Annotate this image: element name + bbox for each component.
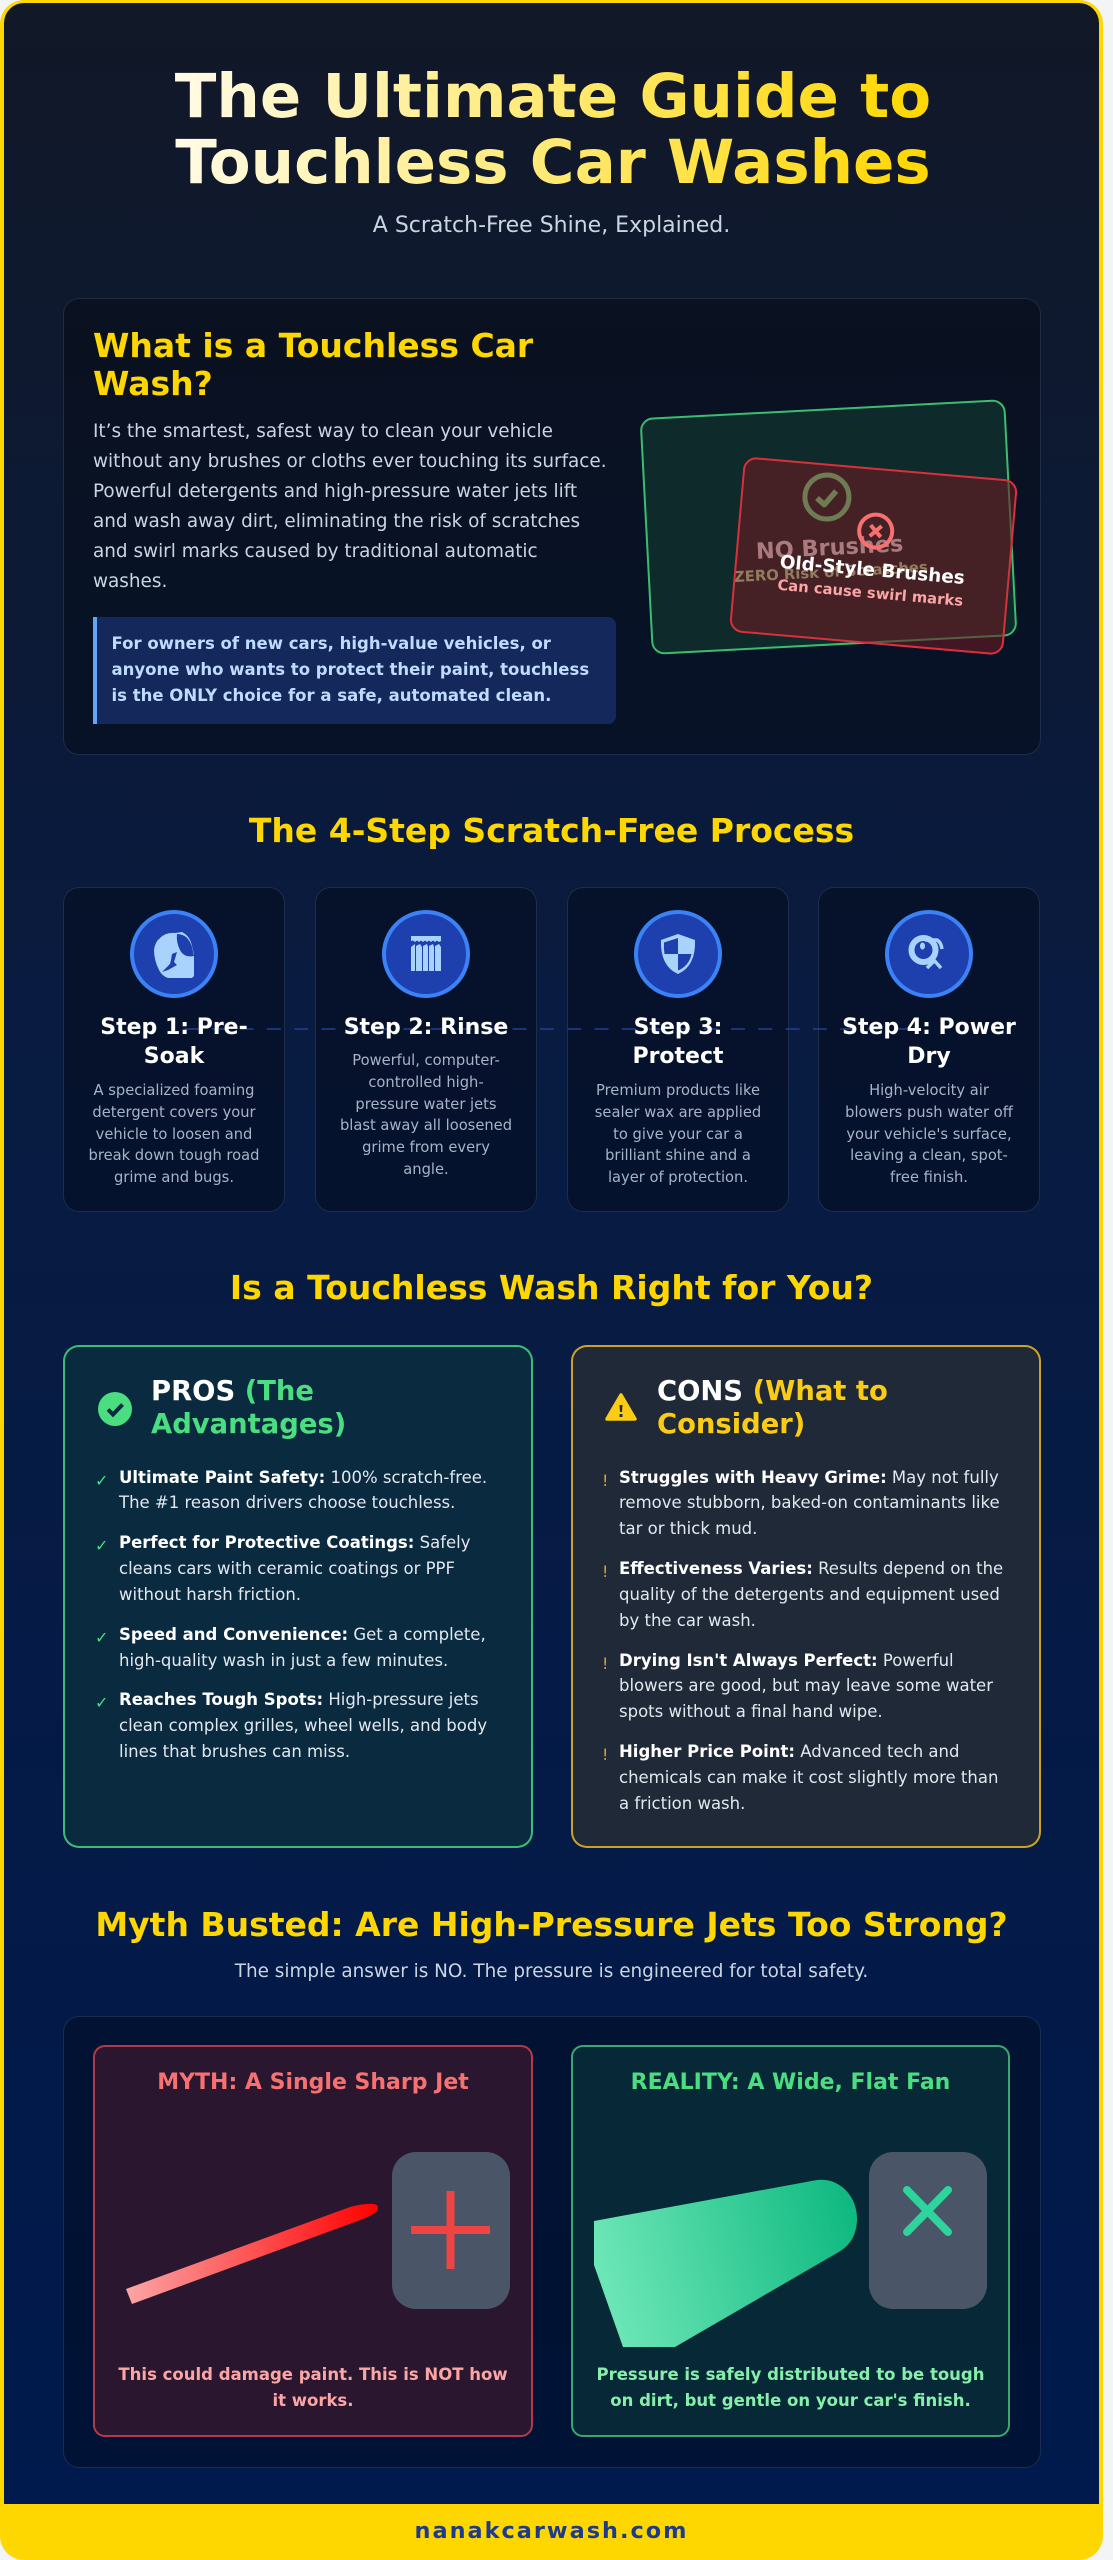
step title bbox=[632, 1015, 724, 1069]
step title: Dry bbox=[907, 1044, 951, 1069]
text block: definition: It’s the smartest, safest way to clean your vehicle bbox=[93, 421, 553, 442]
callout: who it is for: is the ONLY choice for a safe, automated clean. bbox=[112, 686, 551, 705]
step description: angle. bbox=[403, 1161, 449, 1178]
myth caption bbox=[118, 2365, 508, 2410]
icon: protective shield bbox=[634, 910, 722, 998]
step description: pressure water jets bbox=[355, 1096, 497, 1113]
reality title: REALITY: A Wide, Flat Fan bbox=[631, 2070, 950, 2094]
step title: Protect bbox=[632, 1044, 724, 1069]
step description bbox=[845, 1082, 1014, 1186]
step description: layer of protection. bbox=[608, 1169, 748, 1186]
icon: check badge bbox=[98, 1392, 132, 1426]
panel: pros: ✓ bbox=[95, 1470, 108, 1490]
pros heading bbox=[151, 1376, 346, 1440]
pros item 2: Perfect for Protective Coatings: Safely bbox=[119, 1533, 470, 1552]
step title: Soak bbox=[144, 1044, 204, 1069]
pros item 1: The #1 reason drivers choose touchless. bbox=[119, 1493, 455, 1512]
pros item 3 bbox=[95, 1625, 486, 1670]
text block: definition: and swirl marks caused by traditional automatic bbox=[93, 541, 538, 562]
step description: brilliant shine and a bbox=[605, 1147, 751, 1164]
card: no brushes: ZERO Risk of Scratches bbox=[734, 559, 928, 586]
cons item 4: Higher Price Point: Advanced tech and bbox=[619, 1742, 959, 1761]
step 2 card bbox=[315, 887, 537, 1212]
pros item 1 bbox=[95, 1468, 487, 1512]
panel: cons: ! bbox=[602, 1562, 608, 1581]
panel: what is a touchless car wash bbox=[63, 298, 1041, 755]
step title: Step 1: Pre- bbox=[100, 1015, 248, 1040]
pros heading: Advantages) bbox=[151, 1409, 346, 1440]
step description bbox=[89, 1082, 259, 1186]
step description: Powerful, computer- bbox=[352, 1052, 500, 1069]
pros item 3: Speed and Convenience: Get a complete, bbox=[119, 1625, 486, 1644]
step 1 card bbox=[63, 887, 285, 1212]
card: no brushes bbox=[641, 400, 1016, 654]
heading: myth busted: Myth Busted: Are High-Pressure Jets Too Strong? bbox=[95, 1905, 1008, 1944]
step description: to give your car a bbox=[613, 1126, 743, 1143]
reality caption: Pressure is safely distributed to be tough bbox=[596, 2365, 984, 2384]
illustration: no brushes vs old-style brushes cards bbox=[640, 400, 1018, 655]
cons item 3: spots without a final hand wipe. bbox=[619, 1702, 883, 1721]
cons item 2: by the car wash. bbox=[619, 1611, 756, 1630]
pros item 4: clean complex grilles, wheel wells, and body bbox=[119, 1716, 487, 1735]
step description: break down tough road bbox=[89, 1147, 259, 1164]
process connector line bbox=[185, 1028, 908, 1030]
text block: definition bbox=[93, 421, 607, 592]
text block: definition: and wash away dirt, eliminating the risk of scratches bbox=[93, 511, 580, 532]
step description: your vehicle's surface, bbox=[846, 1126, 1012, 1143]
reality caption bbox=[596, 2365, 984, 2410]
title bbox=[174, 64, 932, 196]
step description: leaving a clean, spot- bbox=[850, 1147, 1008, 1164]
card: old-style brushes: Old-Style Brushes bbox=[779, 552, 966, 589]
step description: blowers push water off bbox=[845, 1104, 1013, 1121]
step description bbox=[595, 1082, 761, 1186]
cons heading: Consider) bbox=[657, 1409, 805, 1440]
pros item 2: without harsh friction. bbox=[119, 1585, 301, 1604]
card: old-style brushes bbox=[730, 457, 1017, 655]
card: no brushes: NO Brushes bbox=[755, 531, 904, 565]
step description: vehicle to loosen and bbox=[96, 1126, 252, 1143]
title: The Ultimate Guide to bbox=[175, 61, 931, 132]
text block: definition: without any brushes or cloths ever touching its surface. bbox=[93, 451, 607, 472]
step description: detergent covers your bbox=[92, 1104, 256, 1121]
step title: Step 2: Rinse bbox=[344, 1015, 508, 1040]
step description bbox=[340, 1052, 512, 1178]
step title: Step 4: Power bbox=[842, 1015, 1016, 1040]
step description: grime from every bbox=[362, 1139, 490, 1156]
pros item 2: cleans cars with ceramic coatings or PPF bbox=[119, 1559, 455, 1578]
step title: Step 3: bbox=[634, 1015, 722, 1040]
cons item 1: Struggles with Heavy Grime: May not fully bbox=[619, 1468, 999, 1486]
title: Touchless Car Washes bbox=[175, 127, 931, 198]
panel: cons: ! bbox=[602, 1745, 608, 1764]
cons heading bbox=[657, 1376, 888, 1440]
step description: High-velocity air bbox=[869, 1082, 989, 1099]
cons item 1 bbox=[602, 1468, 1000, 1538]
panel: cons: ! bbox=[602, 1654, 608, 1672]
pros item 4: lines that brushes can miss. bbox=[119, 1742, 350, 1761]
cons item 1: tar or thick mud. bbox=[619, 1519, 757, 1538]
step description: sealer wax are applied bbox=[595, 1104, 761, 1121]
text block: definition: washes. bbox=[93, 571, 167, 592]
panel: cons bbox=[571, 1345, 1041, 1848]
panel: pros bbox=[63, 1345, 533, 1848]
cons item 3 bbox=[602, 1650, 994, 1721]
heading: what is: Wash? bbox=[93, 364, 213, 403]
pros item 4: Reaches Tough Spots: High-pressure jets bbox=[119, 1690, 479, 1709]
cons item 4: a friction wash. bbox=[619, 1794, 745, 1813]
icon: warning triangle bbox=[605, 1393, 637, 1421]
step description: blast away all loosened bbox=[340, 1117, 512, 1134]
step description: A specialized foaming bbox=[94, 1082, 254, 1099]
callout: who it is for bbox=[93, 617, 616, 724]
panel: pros: ✓ bbox=[95, 1628, 108, 1647]
myth caption: This could damage paint. This is NOT how bbox=[118, 2365, 508, 2384]
cons item 2: Effectiveness Varies: Results depend on the bbox=[619, 1559, 1003, 1578]
illustration: sharp jet on car panel bbox=[126, 2152, 510, 2309]
step description: free finish. bbox=[890, 1169, 968, 1186]
step description: grime and bugs. bbox=[114, 1169, 234, 1186]
pros item 1: Ultimate Paint Safety: 100% scratch-free. bbox=[119, 1468, 487, 1486]
callout: who it is for: For owners of new cars, high-value vehicles, or bbox=[112, 634, 551, 653]
card: reality bbox=[571, 2045, 1010, 2437]
cons item 2 bbox=[602, 1559, 1003, 1630]
pros heading: PROS (The bbox=[151, 1376, 314, 1406]
cons heading: CONS (What to bbox=[657, 1376, 888, 1406]
card: old-style brushes: Can cause swirl marks bbox=[777, 577, 964, 610]
card: myth bbox=[93, 2045, 533, 2437]
pros item 4 bbox=[95, 1690, 487, 1761]
panel: pros: ✓ bbox=[95, 1693, 108, 1712]
panel: cons: ! bbox=[602, 1470, 608, 1490]
heading: 4-step process: The 4-Step Scratch-Free Process bbox=[249, 811, 854, 850]
cons item 1: remove stubborn, baked-on contaminants like bbox=[619, 1493, 1000, 1512]
panel: pros: ✓ bbox=[95, 1536, 108, 1555]
cons item 4 bbox=[602, 1742, 998, 1813]
footer website: nanakcarwash.com bbox=[415, 2518, 688, 2544]
pros item 2 bbox=[95, 1533, 470, 1604]
step title bbox=[842, 1015, 1016, 1069]
cons item 3: blowers are good, but may leave some water bbox=[619, 1676, 993, 1695]
step 4 card bbox=[818, 887, 1040, 1212]
step description: controlled high- bbox=[368, 1074, 484, 1091]
pros item 3: high-quality wash in just a few minutes. bbox=[119, 1651, 448, 1670]
myth title: MYTH: A Single Sharp Jet bbox=[157, 2070, 469, 2094]
cons item 2: quality of the detergents and equipment used bbox=[619, 1585, 1000, 1604]
subheading: myth busted: The simple answer is NO. The pressure is engineered for total safety. bbox=[235, 1961, 868, 1982]
heading: what is: What is a Touchless Car bbox=[93, 326, 533, 365]
reality caption: on dirt, but gentle on your car's finish. bbox=[610, 2391, 971, 2410]
cons item 4: chemicals can make it cost slightly more than bbox=[619, 1768, 998, 1787]
heading: right for you: Is a Touchless Wash Right for You? bbox=[230, 1268, 873, 1307]
step title bbox=[100, 1015, 248, 1069]
callout: who it is for: anyone who wants to protect their paint, touchless bbox=[112, 660, 589, 679]
icon: rinse water jets bbox=[382, 910, 470, 998]
panel: myth vs reality bbox=[63, 2016, 1041, 2468]
icon: power dry blower bbox=[885, 910, 973, 998]
cons item 3: Drying Isn't Always Perfect: Powerful bbox=[619, 1650, 954, 1670]
heading: what is bbox=[93, 326, 534, 403]
step 3 card bbox=[567, 887, 789, 1212]
subtitle: A Scratch-Free Shine, Explained. bbox=[373, 213, 730, 238]
step description: Premium products like bbox=[596, 1082, 760, 1099]
myth caption: it works. bbox=[272, 2391, 354, 2410]
icon: pre-soak foam bbox=[130, 910, 218, 998]
illustration: wide fan on car panel bbox=[594, 2152, 987, 2347]
text block: definition: Powerful detergents and high-pressure water jets lift bbox=[93, 481, 577, 502]
